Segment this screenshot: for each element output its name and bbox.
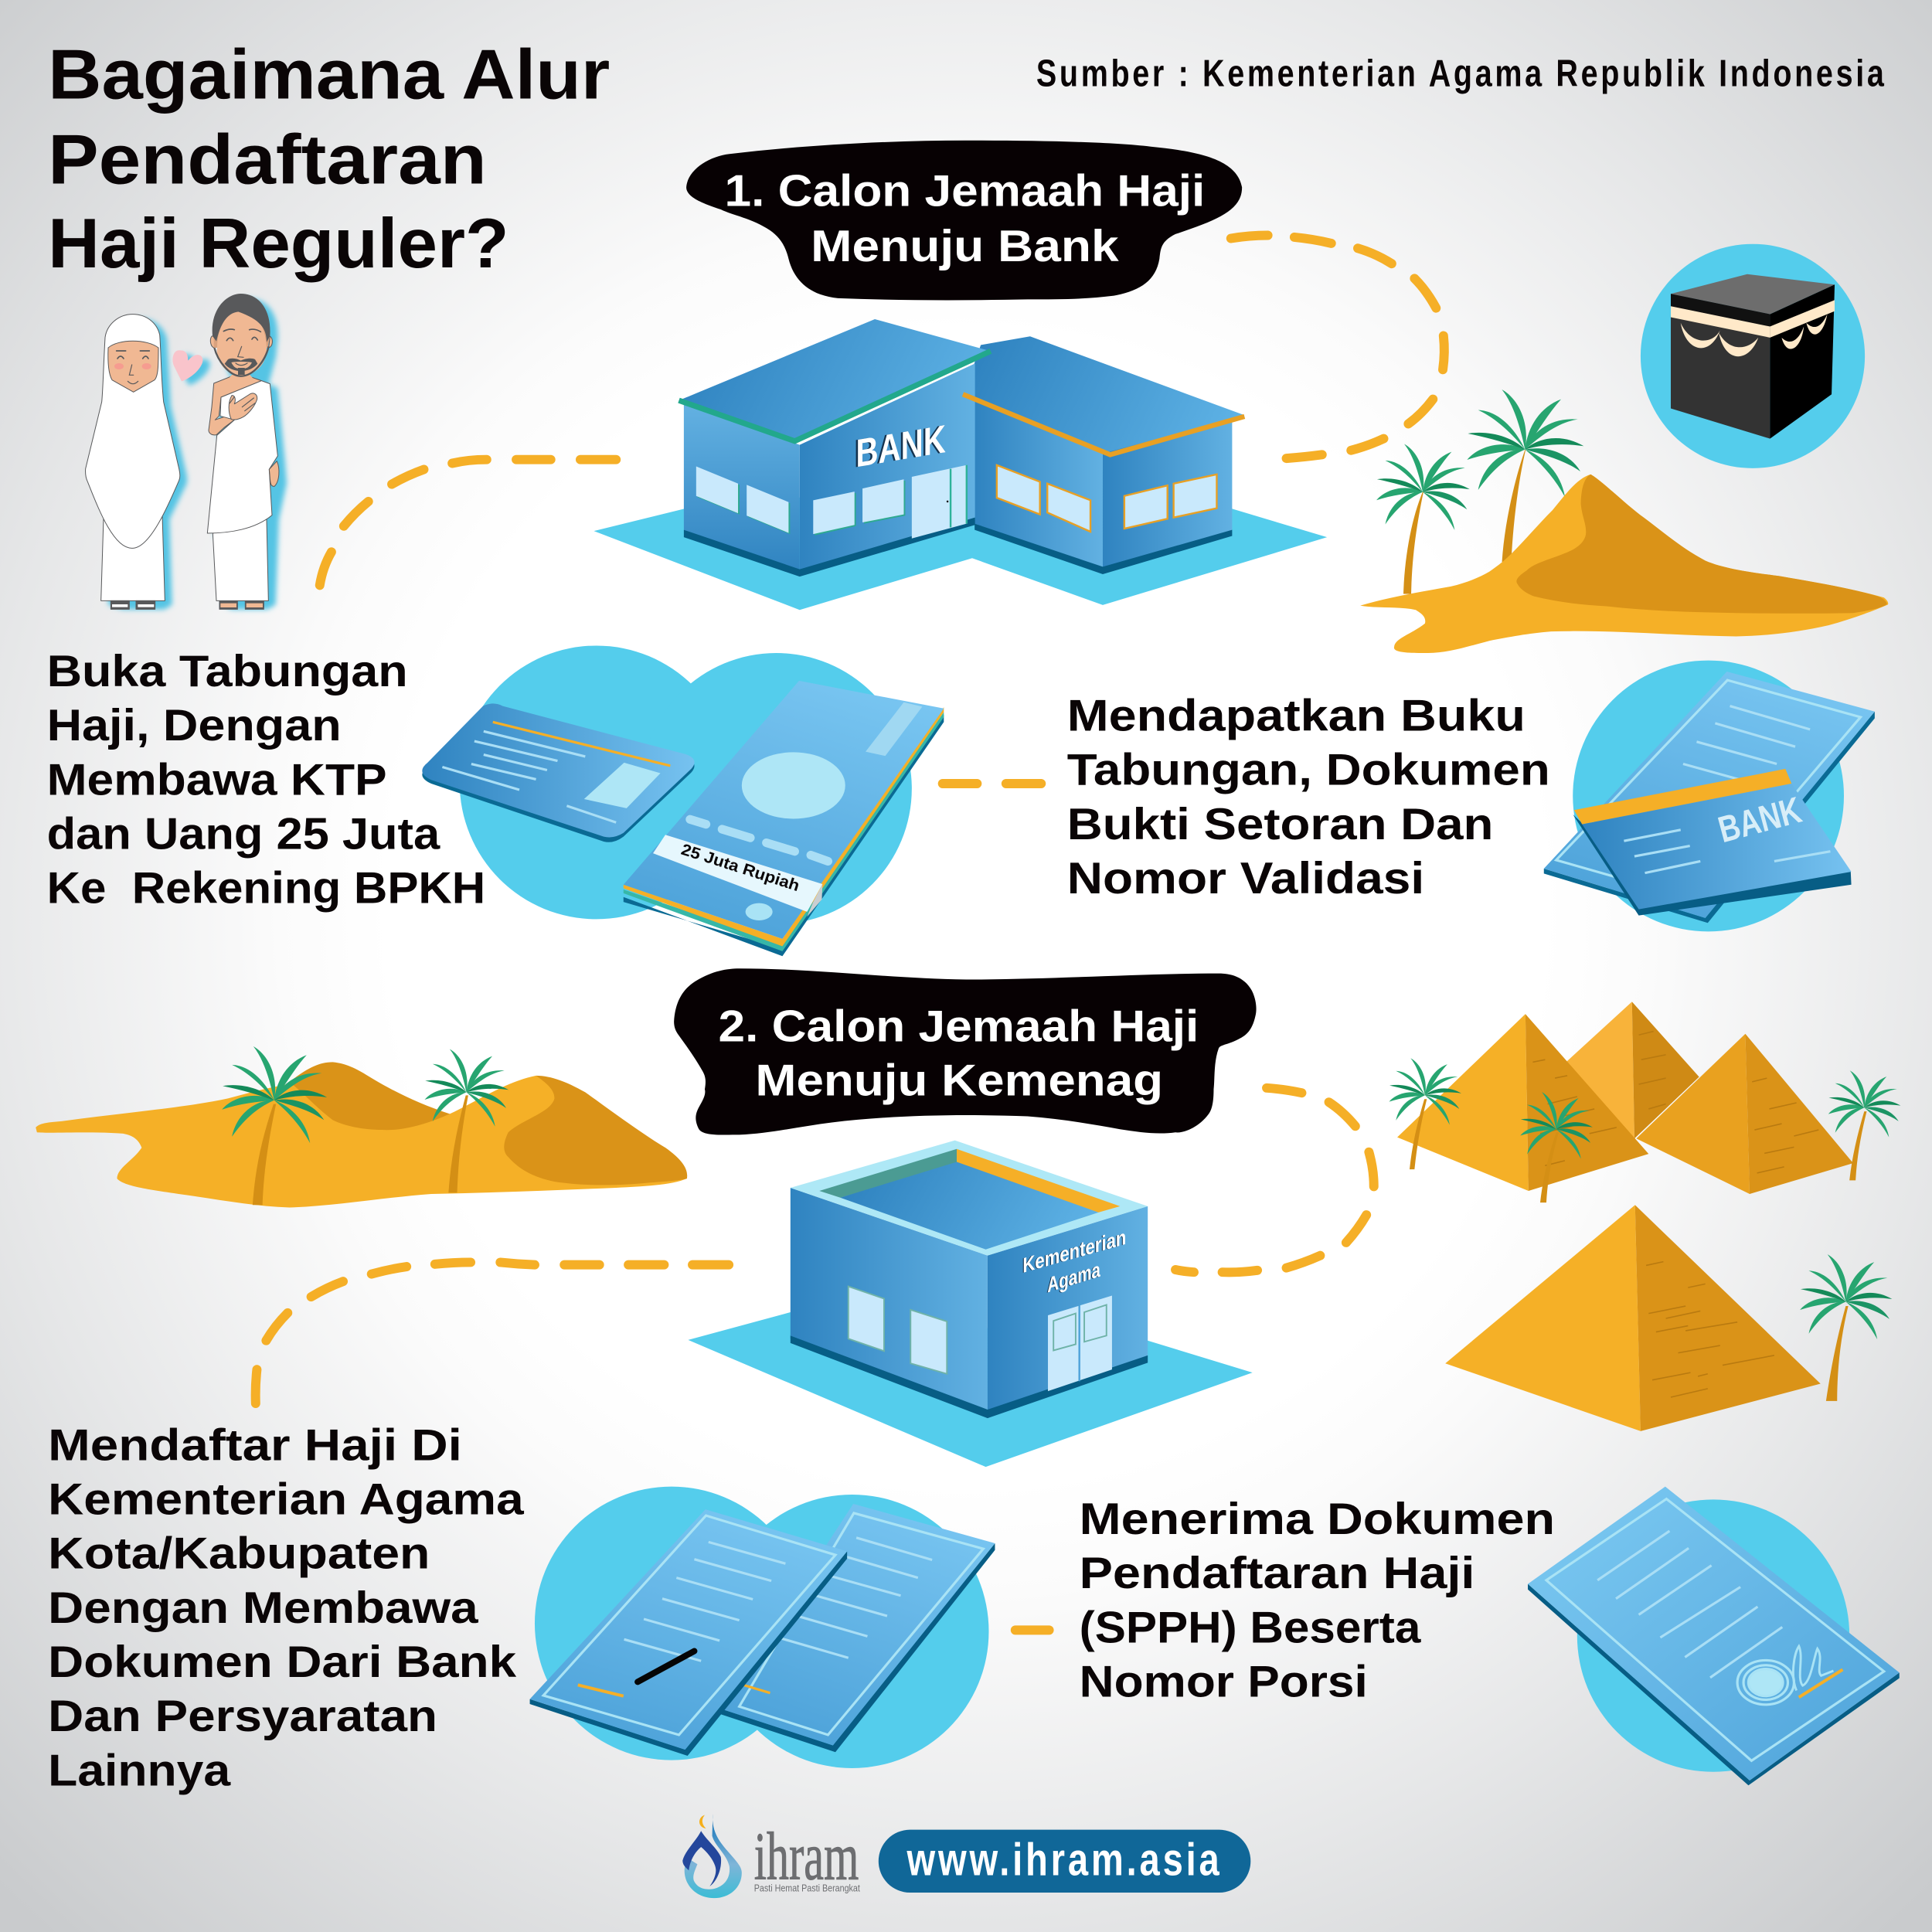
illustration: palm trees and dune, top right	[1360, 389, 1888, 653]
kemenag windows	[849, 1287, 947, 1374]
form right	[719, 1504, 995, 1752]
title	[48, 36, 610, 283]
kemenag door	[1048, 1295, 1112, 1391]
illustration: pilgrim couple	[86, 294, 287, 610]
text block: mendapatkan buku tabungan: Nomor Validasi	[1067, 854, 1424, 903]
icon: drop	[682, 1814, 742, 1898]
right pyramid	[1636, 1034, 1853, 1194]
text block: buka tabungan: Haji, Dengan	[47, 701, 342, 750]
text block: mendaftar haji: Kementerian Agama	[48, 1475, 525, 1525]
text block: menerima dokumen: Menerima Dokumen	[1080, 1495, 1555, 1544]
banknote bundle: 25 Juta Rupiah	[679, 841, 801, 895]
text block: buka tabungan: Membawa KTP	[47, 755, 387, 804]
heart	[172, 350, 202, 381]
text block: mendaftar haji	[48, 1420, 525, 1795]
bank sign: BANK	[854, 417, 944, 476]
illustration: kaaba	[1641, 244, 1865, 468]
illustration: document and passbook	[1544, 661, 1875, 931]
website pill	[879, 1830, 1250, 1893]
back pyramid	[1566, 1002, 1699, 1138]
heading bubble: step 2: Menuju Kemenag	[755, 1056, 1163, 1105]
dashed path: bank to bubble	[1231, 236, 1444, 458]
illustration: kementerian agama building	[688, 1141, 1253, 1467]
illustration: signed SPPH document	[1528, 1487, 1900, 1785]
illustration: big pyramid and palm	[1445, 1205, 1892, 1431]
heading bubble: step 2: 2. Calon Jemaah Haji	[719, 1002, 1199, 1051]
text block: mendaftar haji: Kota/Kabupaten	[48, 1529, 430, 1579]
heading bubble: step 1: Menuju Bank	[811, 222, 1119, 271]
kemenag sign: Agama	[1046, 1257, 1100, 1298]
bank book	[1573, 769, 1852, 916]
dashed path: people to bank	[320, 460, 616, 585]
KTP card	[422, 703, 695, 842]
signature	[1793, 1646, 1833, 1691]
illustration: two forms with pen	[530, 1487, 995, 1768]
kemenag sign: Agama	[1047, 1257, 1100, 1297]
bank windows	[698, 468, 905, 536]
logo: ihram	[682, 1814, 860, 1898]
kemenag sign: Kementerian	[1022, 1225, 1125, 1277]
connector dash: forms to document	[1015, 1628, 1049, 1633]
text block: menerima dokumen	[1080, 1495, 1555, 1706]
right wing of bank	[964, 336, 1244, 574]
text block: mendaftar haji: Dengan Membawa	[48, 1583, 479, 1633]
illustration: palm trees and dune, left	[36, 1046, 687, 1207]
heading bubble: step 2	[674, 968, 1257, 1135]
kemenag sign	[1022, 1225, 1126, 1298]
text block: buka tabungan: Buka Tabungan	[47, 647, 408, 696]
illustration: upper pyramids group	[1389, 1002, 1900, 1202]
text block: mendapatkan buku tabungan: Mendapatkan Buku	[1067, 691, 1526, 740]
text block: menerima dokumen: Pendaftaran Haji	[1080, 1549, 1475, 1598]
connector dash: money to passbook	[943, 781, 1041, 787]
kemenag sign: Kementerian	[1022, 1225, 1126, 1277]
dashed path: registration to kemenag	[256, 1262, 729, 1403]
source credit: Sumber : Kementerian Agama Republik Indonesia	[1036, 52, 1885, 95]
heading bubble: step 1	[686, 141, 1242, 300]
left pyramid	[1397, 1014, 1648, 1191]
logo: ihram: ihram	[754, 1818, 859, 1893]
text block: mendaftar haji: Dan Persyaratan	[48, 1692, 437, 1741]
illustration: ID card and money	[422, 645, 944, 956]
title: Bagaimana Alur	[48, 36, 610, 114]
text block: buka tabungan	[47, 647, 485, 913]
bank book: BANK	[1714, 790, 1806, 851]
title: Haji Reguler?	[48, 205, 509, 283]
website pill: www.ihram.asia	[906, 1835, 1220, 1886]
form left	[530, 1509, 847, 1756]
seal	[1737, 1660, 1794, 1705]
text block: mendapatkan buku tabungan	[1067, 691, 1550, 903]
text block: mendaftar haji: Dokumen Dari Bank	[48, 1638, 516, 1687]
receipt document	[1544, 672, 1875, 923]
text block: mendaftar haji: Lainnya	[48, 1746, 231, 1795]
bank sign: BANK	[855, 416, 946, 475]
illustration: bank building	[594, 319, 1327, 610]
connector dash: kemenag to bubble	[1175, 1088, 1374, 1272]
heading bubble: step 1: 1. Calon Jemaah Haji	[725, 166, 1205, 216]
text block: mendapatkan buku tabungan: Bukti Setoran Dan	[1067, 800, 1493, 849]
text block: menerima dokumen: Nomor Porsi	[1080, 1657, 1368, 1706]
text block: mendapatkan buku tabungan: Tabungan, Dokumen	[1067, 746, 1550, 795]
logo: ihram: Pasti Hemat Pasti Berangkat	[754, 1882, 860, 1893]
text block: buka tabungan: Ke Rekening BPKH	[47, 864, 485, 913]
text block: mendaftar haji: Mendaftar Haji Di	[48, 1420, 462, 1470]
text block: menerima dokumen: (SPPH) Beserta	[1080, 1603, 1421, 1652]
banknote bundle	[624, 681, 944, 956]
text block: buka tabungan: dan Uang 25 Juta	[47, 810, 440, 859]
title: Pendaftaran	[48, 121, 487, 199]
